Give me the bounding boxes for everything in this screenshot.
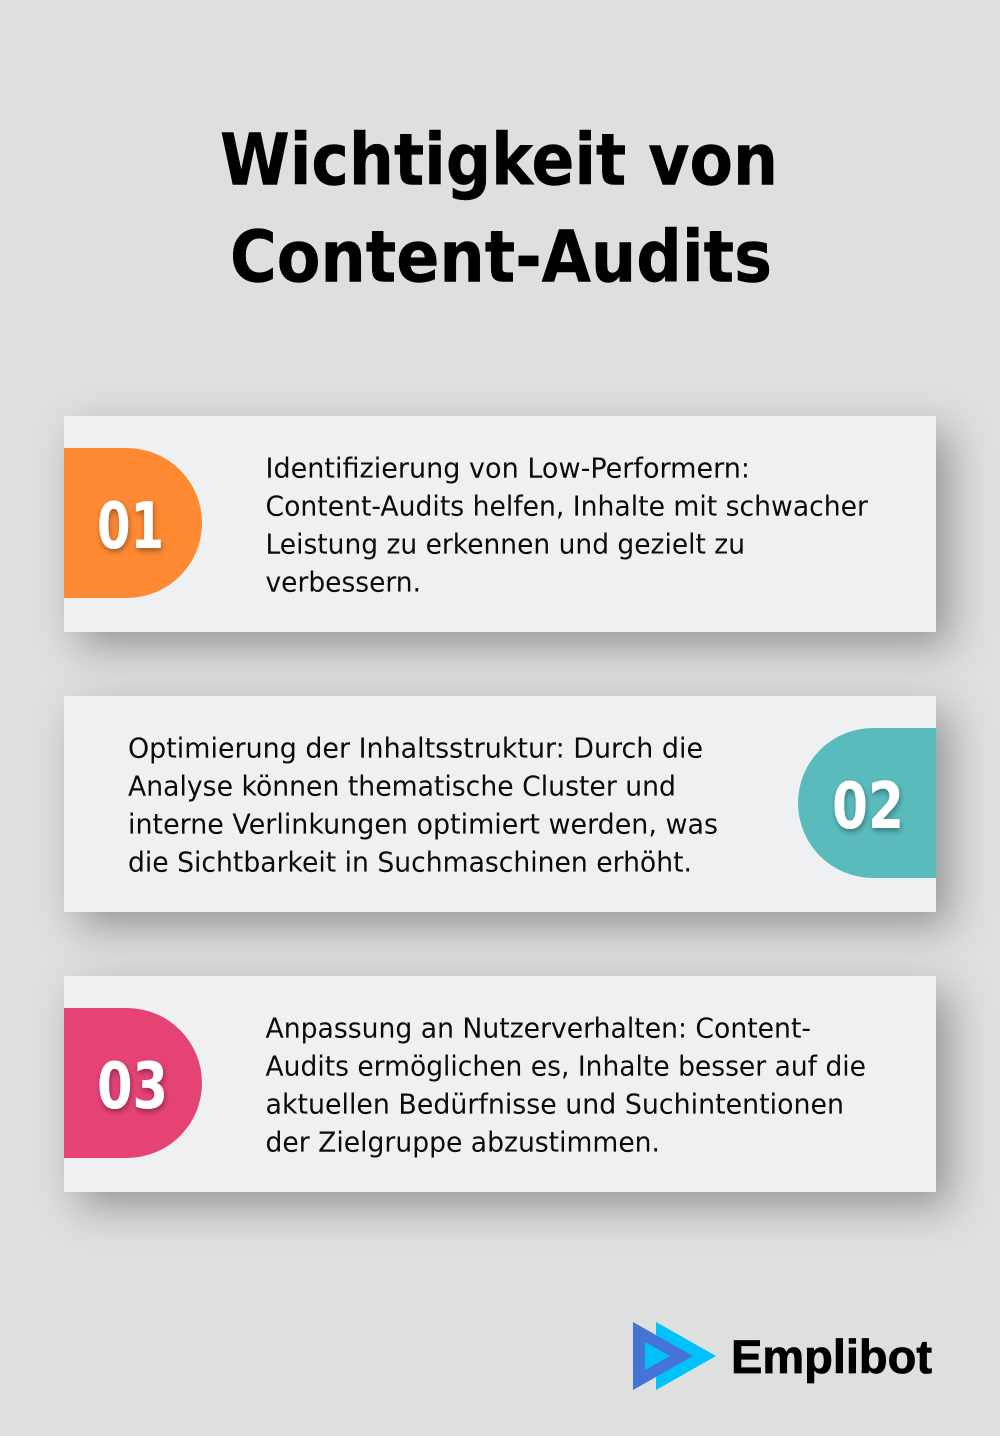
text block: card 01: Identifizierung von Low-Performern: <box>266 452 750 484</box>
text block: card 02: Optimierung der Inhaltsstruktur: Durch die <box>128 732 703 764</box>
wordmark: Emplibot <box>731 1330 932 1383</box>
text block: card 03 <box>266 1012 866 1158</box>
badge: 02: 02 <box>832 770 904 844</box>
title: Content-Audits <box>230 216 772 298</box>
badge: 01: 01 <box>97 490 164 564</box>
title <box>220 118 778 298</box>
icon: play triangles <box>633 1322 716 1390</box>
text block: card 01: verbessern. <box>266 566 421 598</box>
text block: card 03: der Zielgruppe abzustimmen. <box>266 1126 660 1158</box>
text block: card 01 <box>266 452 869 598</box>
panel: card 01 <box>64 416 936 632</box>
text block: card 03: Audits ermöglichen es, Inhalte besser auf die <box>266 1050 866 1082</box>
badge: 03 <box>64 1008 202 1158</box>
badge: 01 <box>64 448 202 598</box>
title: Wichtigkeit von <box>220 118 778 202</box>
text block: card 02: Analyse können thematische Cluster und <box>128 770 676 802</box>
text block: card 01: Content-Audits helfen, Inhalte mit schwacher <box>266 490 869 522</box>
panel: card 02 <box>64 696 936 912</box>
text block: card 02 <box>128 732 718 878</box>
text block: card 03: Anpassung an Nutzerverhalten: Content- <box>266 1012 811 1044</box>
text block: card 01: Leistung zu erkennen und gezielt zu <box>266 528 745 560</box>
panel: card 03 <box>64 976 936 1192</box>
text block: card 02: die Sichtbarkeit in Suchmaschinen erhöht. <box>128 846 692 878</box>
badge: 02 <box>798 728 936 878</box>
logo: Emplibot <box>633 1322 932 1390</box>
text block: card 03: aktuellen Bedürfnisse und Suchintentionen <box>266 1088 844 1120</box>
text block: card 02: interne Verlinkungen optimiert werden, was <box>128 808 718 840</box>
badge: 03: 03 <box>97 1050 168 1124</box>
